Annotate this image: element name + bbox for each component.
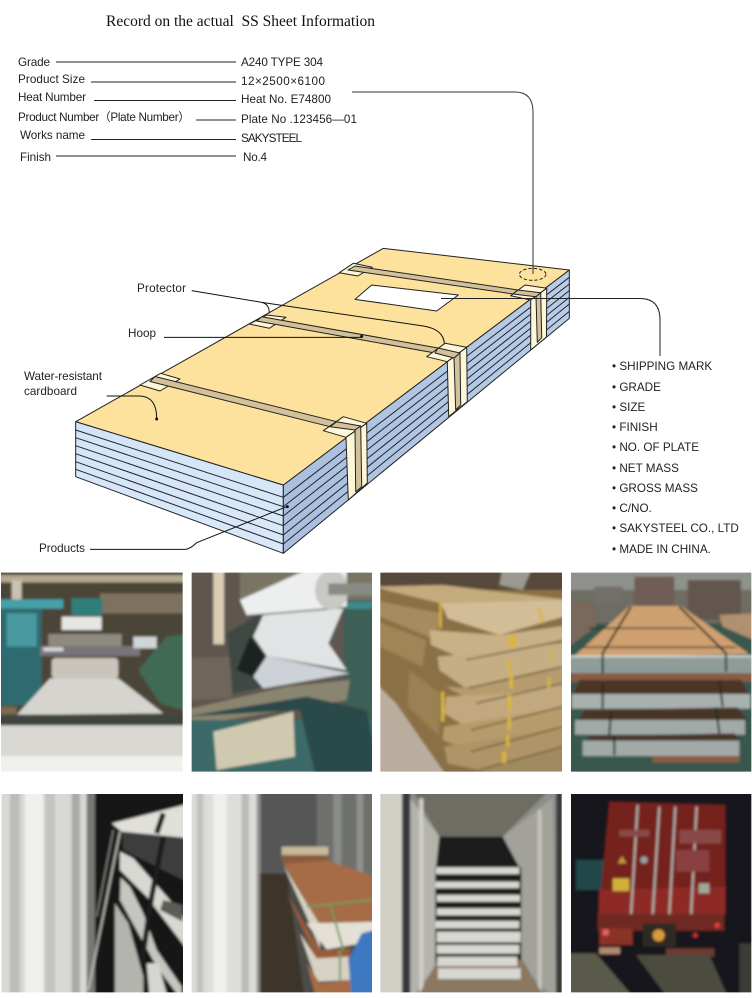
photo: container side wall close-up xyxy=(2,794,183,992)
photo: banded plates on pallets xyxy=(571,572,752,772)
stack faces and top xyxy=(76,248,569,553)
shipping mark list: • NO. OF PLATE xyxy=(612,441,699,454)
photo: film laminating machine xyxy=(192,572,372,772)
shipping mark list: • MADE IN CHINA. xyxy=(612,543,711,556)
row: product size: Product Size xyxy=(18,73,85,86)
row: finish: Finish xyxy=(20,151,51,164)
row: product number xyxy=(18,110,357,126)
shipping mark list: • FINISH xyxy=(612,421,658,434)
callout line: shipping label to list xyxy=(441,298,660,356)
row: grade: Grade xyxy=(18,56,50,69)
photo row 2 group xyxy=(0,783,752,998)
label: hoop: Hoop xyxy=(128,327,156,340)
photo: paper wrapped stacks xyxy=(380,572,562,772)
title: Record on the actual SS Sheet Information xyxy=(106,13,375,30)
record information list xyxy=(18,56,357,164)
row: product size xyxy=(18,73,325,88)
label: water-resistant cardboard xyxy=(24,370,103,398)
row: grade: A240 TYPE 304 xyxy=(241,56,323,69)
row: product size: 12×2500×6100 xyxy=(241,75,325,88)
shipping mark list: • SIZE xyxy=(612,401,646,414)
shipping mark list: • NET MASS xyxy=(612,462,679,475)
row: product number: Product Number（Plate Number） xyxy=(18,110,190,124)
row: works name: Works name xyxy=(20,129,85,142)
shipping mark list: • SHIPPING MARK xyxy=(612,360,712,373)
diagram: packed sheet bundle xyxy=(76,248,569,553)
photo: crated plates in container xyxy=(192,794,372,992)
photo: red container truck at night xyxy=(571,794,752,992)
shipping mark list: • GROSS MASS xyxy=(612,482,698,495)
label: water-resistant cardboard: Water-resistant xyxy=(24,370,103,383)
photo: container loaded with plate stacks xyxy=(380,794,562,992)
hoop band front xyxy=(140,373,367,500)
label: water-resistant cardboard: cardboard xyxy=(24,385,77,398)
shipping mark list: • SAKYSTEEL CO., LTD xyxy=(612,522,739,535)
row: finish xyxy=(20,151,267,164)
row: works name: SAKYSTEEL xyxy=(241,132,302,145)
row: heat number: Heat Number xyxy=(18,91,86,104)
hoop band back xyxy=(339,263,547,350)
shipping mark list xyxy=(612,360,739,556)
row: grade xyxy=(18,56,323,69)
row: product number: Plate No .123456—01 xyxy=(241,113,357,126)
label: products: Products xyxy=(39,542,85,555)
shipping mark list: • GRADE xyxy=(612,381,661,394)
shipping mark list: • C/NO. xyxy=(612,502,652,515)
callout line: heat number to mark xyxy=(352,92,533,274)
hoop band middle xyxy=(249,315,467,417)
row: works name xyxy=(20,129,302,145)
label: protector: Protector xyxy=(137,282,186,295)
row: heat number xyxy=(18,91,331,106)
leader lines xyxy=(90,291,444,549)
row: finish: No.4 xyxy=(243,151,267,164)
photo row 1 group xyxy=(0,563,752,783)
photo: rolling line with white film xyxy=(1,572,183,772)
row: heat number: Heat No. E74800 xyxy=(241,93,331,106)
